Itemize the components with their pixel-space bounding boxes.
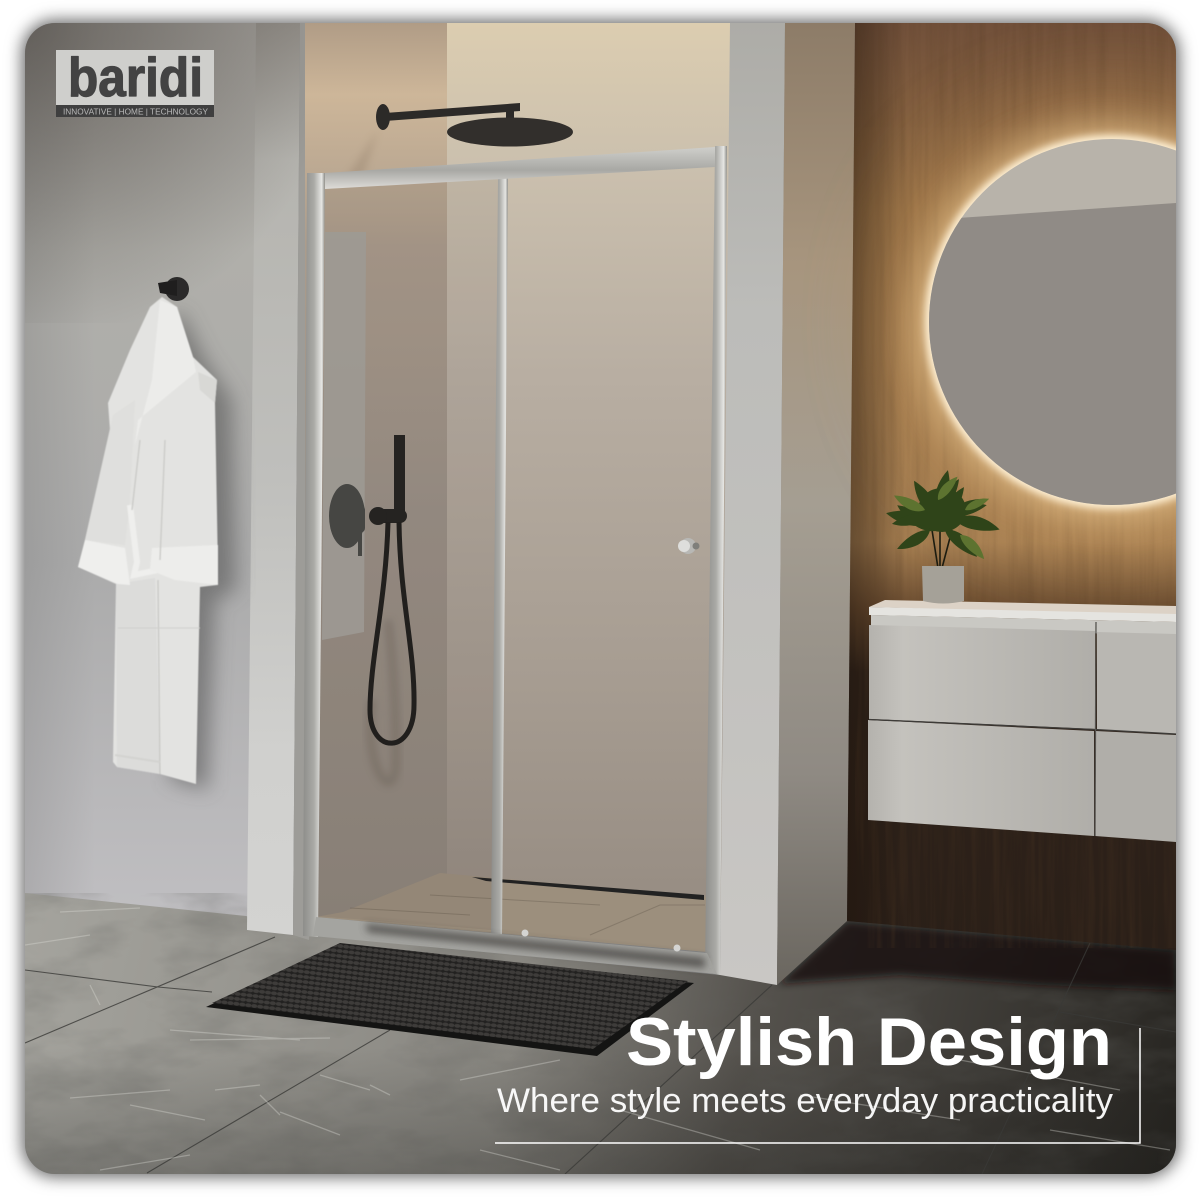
right pillar front: [720, 23, 785, 985]
floor: [25, 893, 1176, 1174]
heading: Stylish Design: [626, 1004, 1112, 1080]
upper right drawer: [1097, 632, 1176, 734]
shower floor: [316, 873, 707, 952]
robe collar: [138, 302, 195, 430]
left wall: [25, 23, 260, 923]
robe left sleeve: [85, 400, 135, 545]
shadow of shower arm: [352, 146, 371, 171]
shower valve: [329, 484, 365, 556]
robe left cuff: [78, 540, 130, 585]
door roller left: [522, 930, 528, 936]
towel hook: [158, 277, 189, 301]
logo wordmark: baridi: [68, 46, 203, 108]
plant pot: [922, 566, 964, 604]
potted plant: [885, 469, 1001, 604]
left pillar: [247, 23, 309, 940]
bathrobe: [78, 297, 218, 784]
door frame right post: [705, 146, 727, 975]
vanity unit: [868, 600, 1176, 842]
robe lower body: [116, 578, 160, 774]
shower door glass: [303, 146, 727, 975]
mirror backlight glow: [897, 107, 1200, 537]
recessed niche: [322, 232, 366, 640]
hose shadow: [370, 620, 396, 782]
bath mat: [206, 943, 694, 1056]
hand shower and hose: [369, 435, 414, 743]
logo: [56, 46, 214, 117]
door knob: [678, 538, 700, 554]
wood wall: [847, 23, 1176, 950]
top-left corner vignette: [25, 23, 296, 300]
logo tagline: INNOVATIVE | HOME | TECHNOLOGY: [63, 106, 208, 116]
top rail: [325, 147, 715, 189]
bottom rail: [313, 917, 717, 974]
rail reflection: [365, 924, 705, 968]
door frame left post: [303, 173, 325, 937]
shower head: [376, 103, 573, 146]
subheading: Where style meets everyday practicality: [497, 1082, 1113, 1120]
robe right cuff: [150, 545, 218, 585]
door divider: [491, 176, 508, 935]
upper left drawer: [869, 625, 1095, 729]
round mirror: [929, 139, 1179, 510]
robe belt: [130, 505, 158, 575]
lower right drawer: [1095, 731, 1176, 842]
shower back wall: [447, 23, 732, 903]
caption bracket: [495, 1028, 1140, 1143]
robe shadow: [170, 310, 236, 790]
shower interior left wall: [305, 23, 447, 918]
lower left drawer: [868, 720, 1094, 836]
right pillar side: [777, 23, 855, 985]
door roller right: [674, 944, 680, 952]
